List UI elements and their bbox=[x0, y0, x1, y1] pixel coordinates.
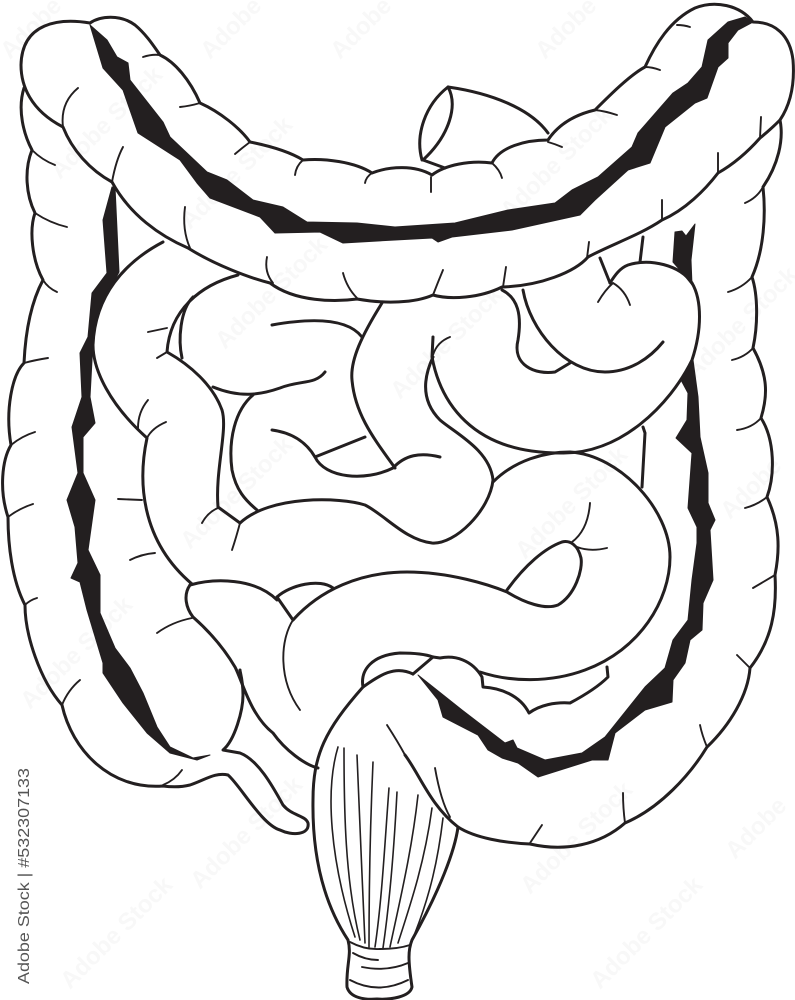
watermark pattern: Adobe bbox=[715, 452, 787, 524]
ileum bbox=[93, 242, 192, 584]
watermark pattern: Adobe Stock bbox=[510, 441, 633, 564]
band: descending colon bbox=[418, 360, 715, 777]
watermark pattern: Adobe Stock bbox=[495, 101, 618, 224]
watermark pattern: Adobe Stock bbox=[175, 431, 298, 554]
large intestine: haustra folds bbox=[8, 25, 775, 843]
watermark pattern: Adobe bbox=[720, 792, 792, 864]
watermark pattern: Adobe Stock bbox=[515, 776, 638, 899]
watermark pattern: Adobe Stock bbox=[210, 231, 333, 354]
upper right loop bbox=[432, 262, 700, 453]
lower big loop bbox=[480, 452, 670, 680]
small intestine bbox=[93, 237, 700, 768]
watermark pattern: Adobe Stock bbox=[585, 871, 708, 994]
watermark pattern: Adobe Stock bbox=[385, 281, 508, 404]
watermark pattern: Adobe Stock bbox=[185, 771, 308, 894]
watermark pattern: Adobe Stock bbox=[15, 591, 138, 714]
band: ascending colon bbox=[67, 187, 210, 760]
left lens and caecum bbox=[277, 583, 333, 597]
watermark pattern: Adobe Stock bbox=[45, 61, 168, 184]
watermark pattern: Adobe Stock bbox=[175, 111, 298, 234]
rectum and sigmoid bbox=[313, 653, 608, 999]
anal canal bands bbox=[350, 942, 410, 988]
small intestine folds bbox=[118, 283, 630, 710]
central coil bbox=[240, 357, 493, 543]
stomach stub bbox=[420, 87, 548, 168]
rectum muscle lines bbox=[331, 747, 443, 948]
band: transverse colon bbox=[90, 17, 753, 243]
large intestine: black mesentery bands bbox=[67, 17, 753, 777]
band: upper right fragment bbox=[673, 224, 695, 285]
credit text: Adobe Stock | #532307133 bbox=[16, 768, 33, 984]
watermark pattern: Adobe Stock bbox=[55, 871, 178, 994]
